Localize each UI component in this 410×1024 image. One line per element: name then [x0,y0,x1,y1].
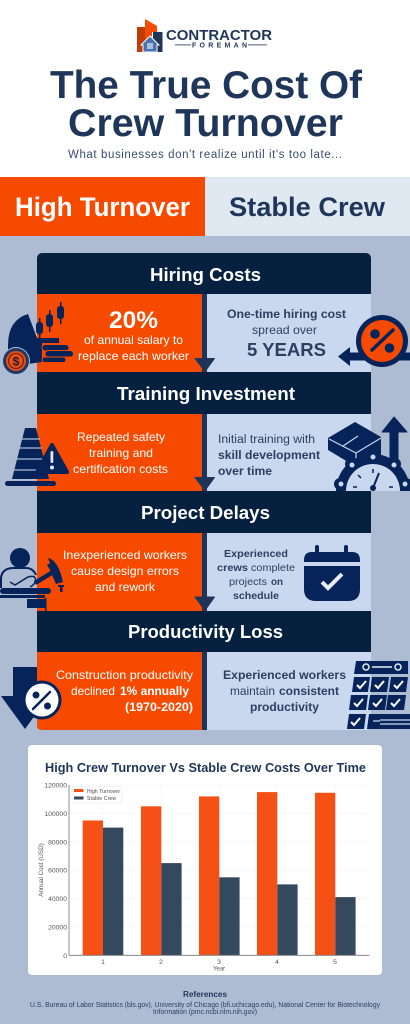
subtitle: What businesses don't realize until it's too late... [68,149,342,161]
column header: Stable Crew: Stable Crew [229,192,385,222]
bar chart [38,782,370,972]
logo: Contractor Foreman: FOREMAN [192,42,247,50]
stable crew: delays text: Experienced [224,548,288,560]
chart title: High Crew Turnover Vs Stable Crew Costs Over Time [45,760,366,775]
chart legend: High Turnover [87,789,120,795]
bar chart: 5 [333,959,337,966]
high turnover: delays text: and rework [95,580,156,594]
icon: worker with hammer [0,548,64,611]
section: Hiring Costs [37,253,371,294]
title: Crew Turnover [68,102,343,145]
logo: Contractor Foreman: CONTRACTOR [166,28,273,44]
bar chart: Year [213,966,225,972]
stable crew: productivity text [207,652,371,730]
stable crew: delays text: crews [217,562,248,574]
section: Training Investment: Training Investment [117,383,295,404]
column header: High Turnover [0,177,205,236]
stable crew: productivity text: productivity [250,702,320,714]
stable crew: delays text: schedule [233,590,279,602]
bar chart: 80000 [48,839,67,846]
bar chart: 4 [275,959,279,966]
high turnover: delays text [37,533,202,611]
stable crew: training text [207,414,371,491]
high turnover: training text: training and [89,446,153,460]
stable crew: productivity text: maintain [230,684,275,698]
high turnover: productivity text: 1% annually [120,686,190,698]
title [50,64,362,145]
column header: High Turnover: High Turnover [15,192,190,222]
high turnover: hiring cost text [37,294,202,372]
section: Productivity Loss: Productivity Loss [128,621,283,642]
center divider [202,294,207,730]
stable crew: hiring cost text [207,294,371,372]
bar chart: 20000 [48,924,67,931]
high turnover: productivity text: declined [71,684,115,698]
arrows between sections [195,358,214,610]
references: References [183,990,228,999]
icon: hand with coins and candlesticks [2,302,74,375]
icon: traffic cone with warning sign [5,428,67,486]
section: Productivity Loss [37,611,371,652]
high turnover: hiring cost text: replace each worker [78,349,189,363]
bar chart: 100000 [44,811,67,818]
bar chart: 3 [217,959,221,966]
stable crew: hiring cost text: One-time hiring cost [227,309,346,321]
stable crew: productivity text: consistent [279,686,339,698]
high turnover: training text: certification costs [73,462,168,476]
column header: Stable Crew [205,177,410,236]
icon: hand with coins and candlesticks: $ [13,354,20,368]
chart legend [72,786,122,803]
high turnover: productivity text [37,652,202,730]
comparison panel [37,253,371,730]
high turnover: delays text: cause design errors [71,564,179,578]
stable crew: training text: over time [218,466,272,478]
high turnover: training text [37,414,202,491]
chart legend: Stable Crew [87,796,116,802]
section: Training Investment [37,372,371,414]
high turnover: hiring cost text: of annual salary to [84,333,183,347]
bar chart: 0 [63,953,67,960]
stable crew: delays text [207,533,371,611]
icon: down arrow with percent badge [1,667,62,729]
bar chart: 40000 [48,896,67,903]
icon: checklist calendar [347,661,410,729]
stable crew: delays text: complete [251,562,295,574]
bar chart: 2 [159,959,163,966]
bar chart: 1 [101,959,105,966]
high turnover: training text: Repeated safety [77,430,165,444]
icon: box, gear gauge and up arrow [328,417,410,491]
references: U.S. Bureau of Labor Statistics (bls.gov), University of Chicago (bfi.uchicago.edu), National Center for Biotechnology [30,1002,380,1009]
section: Project Delays: Project Delays [141,502,270,523]
high turnover: hiring cost text: 20% [109,307,158,334]
stable crew: productivity text: Experienced workers [223,670,346,682]
bar chart: 120000 [44,782,67,790]
bar chart: Annual Cost (USD) [38,843,45,897]
icon: percent circle with left arrow [338,315,410,367]
high turnover: productivity text: Construction productivity [56,668,193,682]
references: Information (pmc.ncbi.nlm.nih.gov) [153,1009,257,1016]
references [30,990,380,1016]
stable crew: training text: Initial training with [218,434,315,446]
title: The True Cost Of [50,64,362,107]
stable crew: delays text: projects [229,576,267,588]
stable crew: hiring cost text: 5 YEARS [247,340,326,360]
bar chart: 60000 [48,868,67,875]
high turnover: delays text: Inexperienced workers [63,548,187,562]
logo: Contractor Foreman [137,19,273,52]
stable crew: training text: skill development [218,450,320,462]
icon: calendar with check [304,545,360,601]
stable crew: delays text: on [271,576,283,588]
high turnover: productivity text: (1970-2020) [125,702,193,714]
chart card [28,745,382,975]
section: Hiring Costs: Hiring Costs [150,264,261,285]
section: Project Delays [37,491,371,533]
stable crew: hiring cost text: spread over [252,323,317,337]
